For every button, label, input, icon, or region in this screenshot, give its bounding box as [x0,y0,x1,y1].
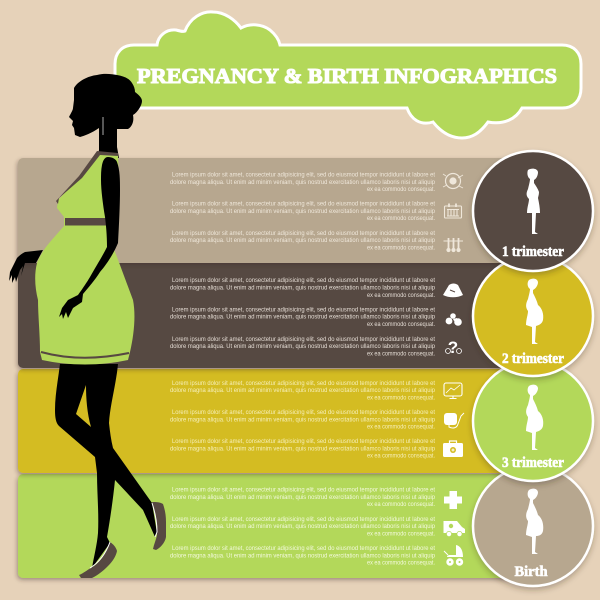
circle: third trimester [473,361,593,481]
circle: second trimester: 2 trimester [502,351,565,367]
icon: medical monitor [444,413,464,428]
text blocks: first trimester: ex ea commodo consequat. [367,244,435,252]
text blocks: third trimester [170,380,435,460]
circle: birth: Birth [514,564,548,580]
icon: medical cross [444,491,462,509]
text blocks: third trimester: Lorem ipsum dolor sit amet, consectetur adipisicing elit, sed do eiusmod tempor incididunt ut labore et [172,409,435,416]
band: birth [18,474,538,578]
text blocks: second trimester: ex ea commodo consequat. [367,350,435,358]
circle: second trimester [473,256,593,376]
text blocks: second trimester: dolore magna aliqua. Ut enim ad minim veniam, quis nostrud exercitation ullamco laboris nisi ut aliquip [170,314,435,320]
text blocks: birth: Lorem ipsum dolor sit amet, consectetur adipisicing elit, sed do eiusmod tempor incididunt ut labore et [172,545,435,552]
text blocks: second trimester: dolore magna aliqua. Ut enim ad minim veniam, quis nostrud exercitation ullamco laboris nisi ut aliquip [170,284,435,292]
text blocks: second trimester: dolore magna aliqua. Ut enim ad minim veniam, quis nostrud exercitation ullamco laboris nisi ut aliquip [170,343,435,350]
text blocks: first trimester: ex ea commodo consequat. [367,186,435,193]
text blocks: third trimester: dolore magna aliqua. Ut enim ad minim veniam, quis nostrud exercitation ullamco laboris nisi ut aliquip [170,387,435,394]
text blocks: birth: dolore magna aliqua. Ut enim ad minim veniam, quis nostrud exercitation ullamco laboris nisi ut aliquip [170,523,435,530]
text blocks: third trimester: ex ea commodo consequat. [367,452,435,460]
text blocks: first trimester: Lorem ipsum dolor sit amet, consectetur adipisicing elit, sed do eiusmod tempor incididunt ut labore et [172,200,435,208]
icon: monitor [444,383,462,398]
icon: question [446,338,462,357]
circle: first trimester: 1 trimester [502,244,565,260]
neck and head [69,74,142,158]
back shoe [152,502,166,550]
text blocks: birth: ex ea commodo consequat. [367,530,435,538]
icon: baby stroller [444,545,463,565]
text blocks: third trimester: Lorem ipsum dolor sit amet, consectetur adipisicing elit, sed do eiusmod tempor incididunt ut labore et [172,438,435,445]
icon: ultrasound [443,284,463,297]
front shoe [79,542,117,578]
icon: target [443,174,463,188]
text blocks: second trimester: Lorem ipsum dolor sit amet, consectetur adipisicing elit, sed do eiusmod tempor incididunt ut labore et [172,336,435,343]
icon: pills [446,313,462,326]
front arm [59,157,120,319]
shoe trims [90,503,157,568]
text blocks: second trimester [170,277,435,358]
text blocks: birth: ex ea commodo consequat. [367,501,435,508]
pregnant woman silhouette [9,74,166,578]
text blocks: third trimester: dolore magna aliqua. Ut enim ad minim veniam, quis nostrud exercitation ullamco laboris nisi ut aliquip [170,416,435,424]
legs [55,364,157,568]
band: third trimester [18,369,538,473]
text blocks: second trimester: Lorem ipsum dolor sit amet, consectetur adipisicing elit, sed do eiusmod tempor incididunt ut labore et [172,277,435,284]
hem stripe [41,352,129,358]
belt [65,218,106,226]
text blocks: first trimester: ex ea commodo consequat. [367,215,435,222]
text blocks: third trimester: ex ea commodo consequat. [367,394,435,402]
text blocks: first trimester: dolore magna aliqua. Ut enim ad minim veniam, quis nostrud exercitation ullamco laboris nisi ut aliquip [170,208,435,215]
band: second trimester [18,263,538,368]
icon: first aid kit [443,441,463,457]
text blocks: second trimester: ex ea commodo consequat. [367,292,435,299]
text blocks: birth [170,486,435,566]
text blocks: third trimester: ex ea commodo consequat. [367,424,435,430]
text blocks: birth: Lorem ipsum dolor sit amet, consectetur adipisicing elit, sed do eiusmod tempor incididunt ut labore et [172,516,435,523]
dress collar shadow [56,151,118,204]
text blocks: second trimester: Lorem ipsum dolor sit amet, consectetur adipisicing elit, sed do eiusmod tempor incididunt ut labore et [172,306,435,314]
text blocks: third trimester: dolore magna aliqua. Ut enim ad minim veniam, quis nostrud exercitation ullamco laboris nisi ut aliquip [170,446,435,452]
text blocks: first trimester: dolore magna aliqua. Ut enim ad minim veniam, quis nostrud exercitation ullamco laboris nisi ut aliquip [170,237,435,244]
title: PREGNANCY & BIRTH INFOGRAPHICS [137,64,557,88]
text blocks: birth: Lorem ipsum dolor sit amet, consectetur adipisicing elit, sed do eiusmod tempor incididunt ut labore et [172,486,435,494]
text blocks: first trimester: Lorem ipsum dolor sit amet, consectetur adipisicing elit, sed do eiusmod tempor incididunt ut labore et [172,230,435,237]
icon: question: ? [448,338,458,357]
text blocks: birth: dolore magna aliqua. Ut enim ad minim veniam, quis nostrud exercitation ullamco laboris nisi ut aliquip [170,552,435,560]
band: first trimester [18,158,538,263]
circle: third trimester: 3 trimester [502,455,565,471]
back hand and arm [9,250,43,283]
text blocks: second trimester: ex ea commodo consequat. [367,321,435,328]
text blocks: first trimester: dolore magna aliqua. Ut enim ad minim veniam, quis nostrud exercitation ullamco laboris nisi ut aliquip [170,179,435,186]
text blocks: birth: dolore magna aliqua. Ut enim ad minim veniam, quis nostrud exercitation ullamco laboris nisi ut aliquip [170,494,435,501]
text blocks: third trimester: Lorem ipsum dolor sit amet, consectetur adipisicing elit, sed do eiusmod tempor incididunt ut labore et [172,380,435,387]
text blocks: first trimester: Lorem ipsum dolor sit amet, consectetur adipisicing elit, sed do eiusmod tempor incididunt ut labore et [172,172,435,178]
icon: chart bars [444,238,463,252]
circle: birth [473,466,593,586]
title banner cloud [115,12,581,138]
icon: ambulance [444,521,465,537]
dress [35,153,134,364]
text blocks: birth: ex ea commodo consequat. [367,560,435,566]
text blocks: first trimester [170,172,435,252]
icon: calendar [444,204,462,218]
circle: first trimester [473,151,593,271]
earring [102,117,104,135]
